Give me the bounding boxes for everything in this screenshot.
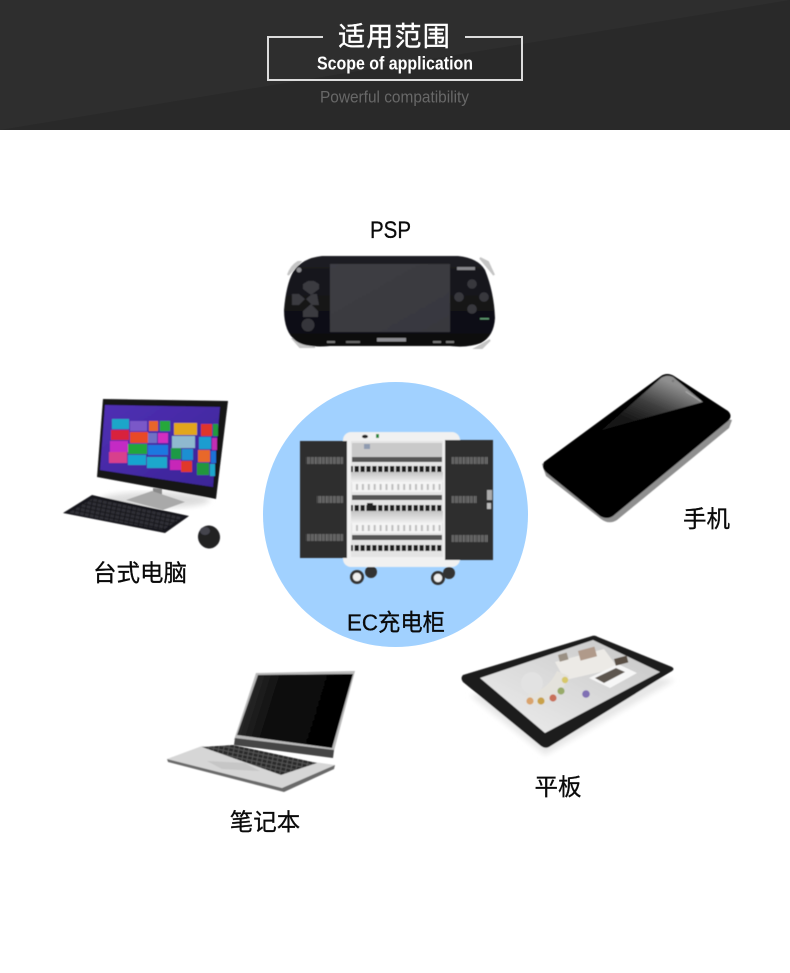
shelf row 1 <box>352 457 442 462</box>
mobile phone <box>542 374 732 532</box>
casters <box>365 566 377 578</box>
PSP device <box>284 217 495 348</box>
cabinet illustration <box>300 432 493 585</box>
right door <box>445 440 493 560</box>
laptop label: 笔记本 <box>230 809 300 835</box>
title: Chinese: 适用范围 <box>338 22 451 52</box>
phone illustration <box>542 374 732 522</box>
tablet illustration <box>462 636 675 755</box>
shelf row 3 <box>352 535 442 540</box>
tablet <box>462 636 675 800</box>
cabinet label: EC充电柜 <box>347 610 445 636</box>
phone label: 手机 <box>683 506 730 532</box>
desktop label: 台式电脑 <box>93 560 187 586</box>
PSP illustration <box>284 256 495 348</box>
subtitle: Powerful compatibility <box>320 88 469 106</box>
title: English: Scope of application <box>317 54 473 74</box>
laptop <box>167 671 355 835</box>
tablet label: 平板 <box>534 774 582 800</box>
PSP label: PSP <box>370 217 411 244</box>
header frame <box>268 37 522 80</box>
shelf row 2 <box>352 495 442 500</box>
laptop illustration <box>167 671 355 792</box>
desktop illustration <box>63 399 228 551</box>
central charging cabinet <box>263 382 528 647</box>
blue circle <box>263 382 528 647</box>
left door <box>300 441 347 558</box>
desktop computer <box>63 399 228 586</box>
header banner <box>0 0 790 130</box>
